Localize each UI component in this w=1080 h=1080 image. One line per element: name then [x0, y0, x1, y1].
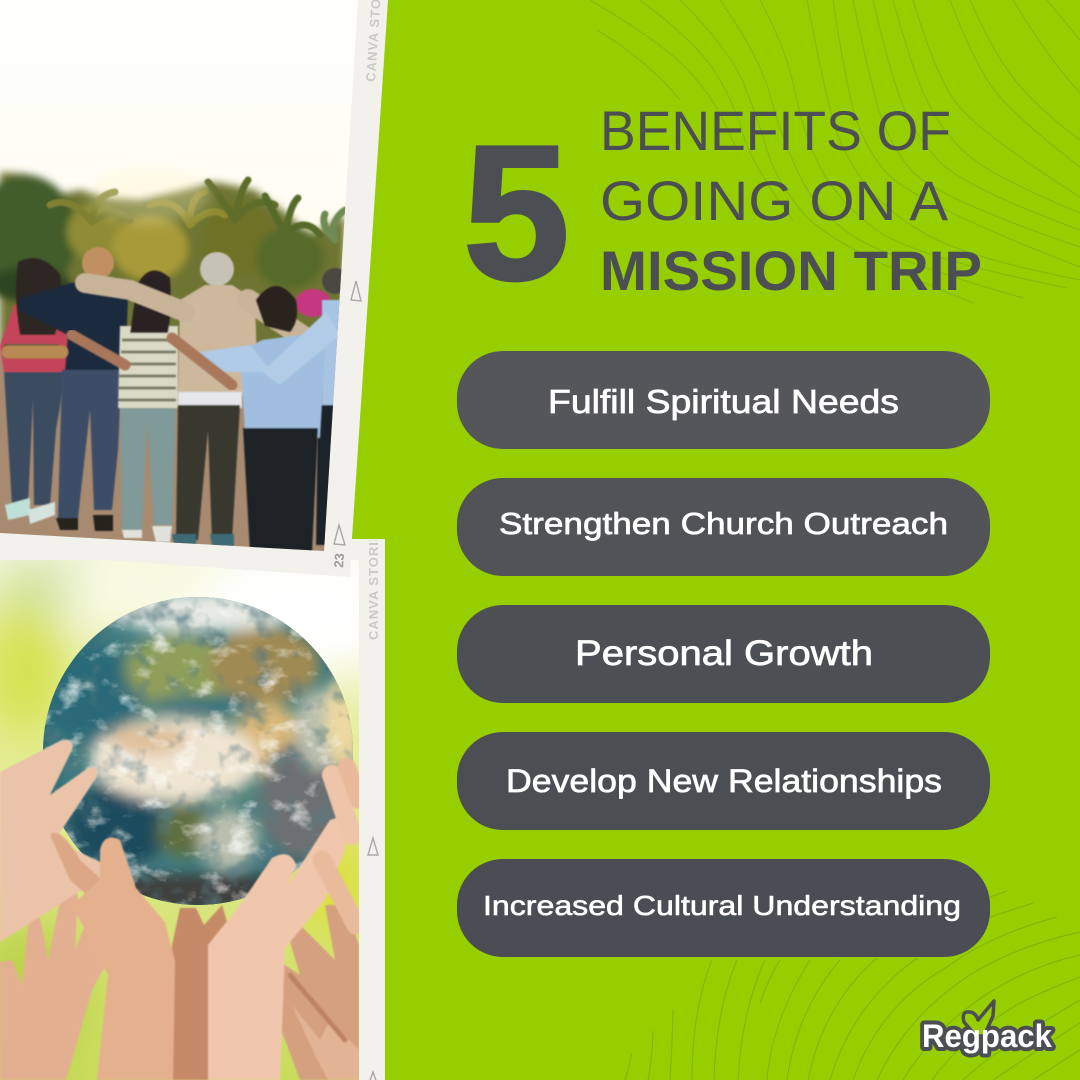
frame label: CANVA STORIES: [366, 522, 381, 640]
frame triangle marks: [368, 838, 378, 1080]
centre hand: [72, 838, 175, 1080]
contour lines top right: [590, 0, 1080, 303]
clasped hands and arms: [8, 335, 232, 385]
photo: hands holding globe: [0, 560, 359, 1080]
back centre hand: [172, 905, 228, 1080]
trees: [0, 167, 345, 350]
right fingers: [332, 775, 352, 835]
sky: [0, 0, 360, 300]
left lower hand: [0, 893, 104, 1080]
benefit 2: [457, 478, 990, 576]
logo outline wordmark: Regpack: [922, 1018, 1052, 1054]
photo: group with arms around each other: [0, 0, 360, 555]
beige arm right: [248, 300, 302, 336]
person 3: [118, 270, 178, 542]
benefit 1: [457, 351, 990, 449]
globe: [40, 592, 365, 910]
sun glow: [90, 167, 210, 223]
person 6: [315, 268, 342, 546]
number five: 5: [463, 105, 570, 320]
benefit 5: Increased Cultural Understanding: [483, 890, 961, 921]
benefit 2: Strengthen Church Outreach: [499, 506, 948, 541]
cloud texture: [43, 597, 353, 905]
frame number: 23: [331, 553, 347, 568]
photo frame: team: [0, 0, 388, 577]
title line 3: MISSION TRIP: [600, 239, 982, 302]
benefit 5: [457, 859, 990, 957]
person 2: [18, 247, 128, 531]
person 1: [0, 258, 72, 524]
logo check mark: [963, 1001, 994, 1036]
title: [463, 99, 982, 320]
beige arm left: [85, 283, 185, 312]
palm fronds: [50, 180, 345, 240]
right hand: [208, 815, 346, 1080]
logo: Regpack: [922, 1001, 1052, 1054]
benefit 4: [457, 732, 990, 830]
contour lines bottom right: [625, 891, 1080, 1080]
photo frame: globe: [0, 522, 385, 1080]
right back hand: [281, 904, 359, 1080]
person 5: [200, 286, 340, 552]
left top hand: [0, 740, 105, 942]
ground: [0, 345, 360, 555]
benefit 1: Fulfill Spiritual Needs: [548, 383, 899, 420]
blurred background: [0, 560, 359, 1080]
benefit 4: Develop New Relationships: [506, 763, 942, 799]
title line 2: GOING ON A: [600, 169, 949, 232]
benefit 3: Personal Growth: [575, 634, 873, 673]
person 4: [85, 252, 302, 546]
benefit 3: [457, 605, 990, 703]
logo wordmark: Regpack: [922, 1018, 1052, 1054]
flowers: [295, 289, 331, 317]
frame triangle marks: [334, 281, 361, 545]
dark terrain texture: [43, 597, 353, 905]
hands: [0, 740, 359, 1080]
title line 1: BENEFITS OF: [600, 99, 951, 162]
